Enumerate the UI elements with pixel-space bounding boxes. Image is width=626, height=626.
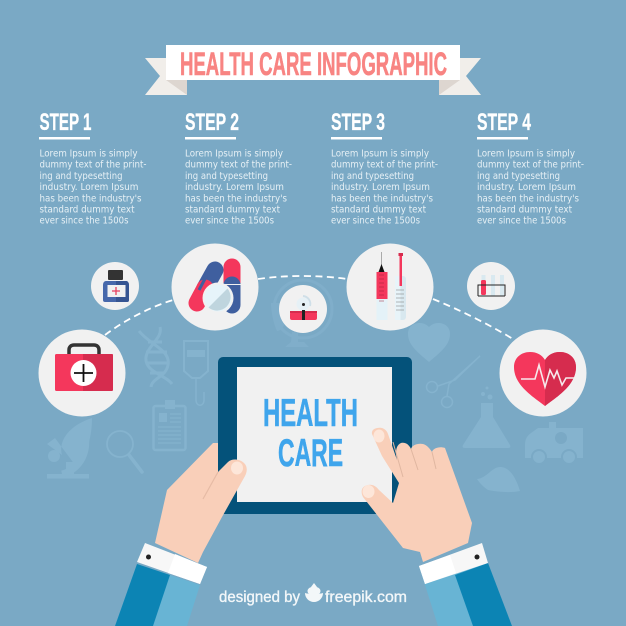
icon: medicine bottle bbox=[91, 262, 139, 310]
ghost icon: clipboard bbox=[154, 400, 186, 450]
step 4 column bbox=[477, 109, 584, 227]
icon: syringes bbox=[346, 244, 434, 330]
step 2 column: Lorem Ipsum is simply bbox=[185, 148, 283, 160]
dashed connector arcs bbox=[105, 276, 513, 339]
step 3 column: ever since the 1500s bbox=[331, 216, 420, 227]
ghost icon: DNA bbox=[139, 327, 172, 387]
step 2 column: has been the industry's bbox=[185, 193, 287, 204]
step 3 column: ing and typesetting bbox=[331, 171, 414, 182]
step 4 column: Lorem Ipsum is simply bbox=[477, 148, 575, 160]
freepik credit: designed by bbox=[219, 589, 300, 606]
step 2 column: standard dummy text bbox=[185, 204, 280, 216]
step 4 column: STEP 4 bbox=[477, 109, 531, 136]
step 4 column: ever since the 1500s bbox=[477, 216, 566, 227]
step 1 column: has been the industry's bbox=[40, 193, 142, 204]
step 2 column: ing and typesetting bbox=[185, 171, 268, 182]
ghost icon: trophy stethoscope bbox=[271, 280, 332, 347]
right hand bbox=[362, 428, 472, 562]
icon: freepik logo bbox=[305, 583, 323, 602]
step 2 column: industry. Lorem Ipsum bbox=[185, 182, 284, 193]
icon: heart with pulse bbox=[500, 330, 586, 416]
icon: small scope bbox=[279, 285, 327, 333]
step 4 column: standard dummy text bbox=[477, 204, 572, 216]
step 3 column: has been the industry's bbox=[331, 193, 433, 204]
ghost icon: cap bbox=[477, 467, 520, 492]
background ghost medical icons bbox=[47, 280, 583, 492]
ghost icon: ambulance bbox=[525, 422, 583, 464]
step 1 column: STEP 1 bbox=[40, 109, 92, 136]
ghost icon: IV bag bbox=[184, 341, 208, 405]
left cuff bbox=[137, 543, 207, 584]
step 1 column: ever since the 1500s bbox=[40, 216, 129, 227]
step 3 column: industry. Lorem Ipsum bbox=[331, 182, 430, 193]
icon: first aid kit bbox=[38, 330, 126, 416]
tablet bbox=[218, 357, 412, 514]
step 1 column: standard dummy text bbox=[40, 204, 135, 216]
step 2 column: ever since the 1500s bbox=[185, 216, 274, 227]
right sleeve bbox=[419, 565, 512, 626]
ghost icon: forceps bbox=[426, 356, 480, 408]
left hand bbox=[155, 443, 247, 563]
step 1 column: Lorem Ipsum is simply bbox=[40, 148, 138, 160]
step 3 column: Lorem Ipsum is simply bbox=[331, 148, 429, 160]
ghost icon: magnifier bbox=[107, 431, 142, 472]
left sleeve bbox=[115, 564, 200, 626]
tablet screen bbox=[237, 367, 392, 502]
ghost icon: heart bbox=[408, 323, 450, 362]
icon: pills bbox=[172, 244, 258, 330]
left arm bbox=[115, 443, 247, 626]
tablet heading: HEALTH bbox=[263, 392, 358, 435]
freepik credit: freepik.com bbox=[325, 589, 407, 606]
freepik credit bbox=[219, 583, 407, 606]
ghost icon: microscope bbox=[47, 418, 92, 478]
step 2 column: dummy text of the print- bbox=[185, 160, 292, 171]
step 1 column: dummy text of the print- bbox=[40, 160, 146, 171]
step 2 column bbox=[185, 109, 292, 227]
step 3 column bbox=[331, 109, 438, 227]
title ribbon bbox=[145, 45, 481, 95]
step 4 column: dummy text of the print- bbox=[477, 160, 584, 171]
step 4 column: ing and typesetting bbox=[477, 171, 560, 182]
tablet: CARE bbox=[278, 432, 343, 475]
step 2 column: STEP 2 bbox=[185, 109, 239, 136]
step 3 column: STEP 3 bbox=[331, 109, 385, 136]
right cuff bbox=[419, 543, 488, 584]
step 4 column: has been the industry's bbox=[477, 193, 579, 204]
right arm bbox=[362, 428, 512, 626]
ghost icon: flask bbox=[463, 386, 510, 448]
icon: test tubes bbox=[467, 262, 515, 310]
step 1 column: ing and typesetting bbox=[40, 171, 123, 182]
step 1 column bbox=[39, 109, 146, 227]
step 1 column: industry. Lorem Ipsum bbox=[40, 182, 138, 193]
step 4 column: industry. Lorem Ipsum bbox=[477, 182, 576, 193]
step 3 column: dummy text of the print- bbox=[331, 160, 438, 171]
step 3 column: standard dummy text bbox=[331, 204, 426, 216]
